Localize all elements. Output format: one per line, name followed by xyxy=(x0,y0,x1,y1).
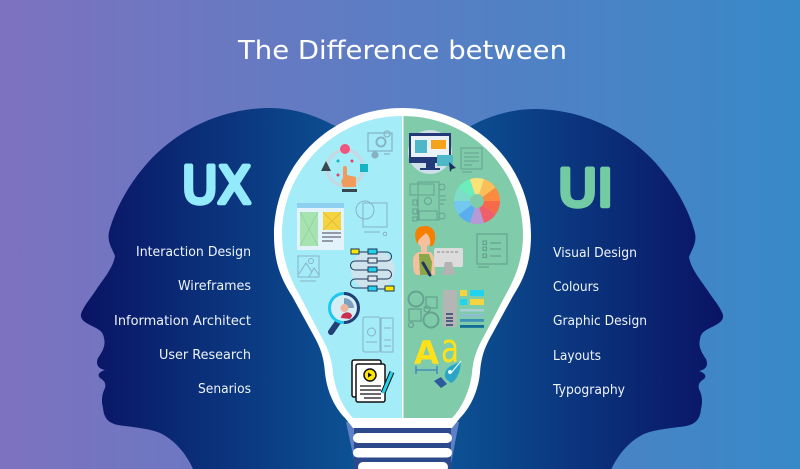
icon: typography Aa with pen nib: a xyxy=(441,326,459,372)
UI heading: UI xyxy=(558,160,613,219)
icon: user research magnifier xyxy=(330,294,358,332)
UI list xyxy=(552,246,647,398)
UI item: Graphic Design: Graphic Design xyxy=(553,314,647,329)
UX item: User Research: User Research xyxy=(159,348,251,363)
UX item: Wireframes: Wireframes xyxy=(178,279,251,294)
icon: designer at computer xyxy=(413,226,463,275)
icon: faded shapes xyxy=(408,292,438,328)
icon: faded checklist xyxy=(477,234,507,267)
UX list xyxy=(114,245,251,397)
UI item: Colours: Colours xyxy=(553,280,599,295)
UX item: Senarios: Senarios xyxy=(198,382,251,397)
icon: flow chart xyxy=(351,249,395,291)
icon: faded image xyxy=(298,256,319,281)
right head silhouette xyxy=(401,109,723,469)
icon: faded document xyxy=(461,148,482,172)
UX heading: UX xyxy=(182,157,251,216)
icon: faded circuit xyxy=(410,182,446,221)
bulb screw base xyxy=(346,422,459,469)
icon: faded frame xyxy=(356,201,387,236)
bulb UI half xyxy=(404,116,523,418)
UX item: Information Architect: Information Architect xyxy=(114,314,251,329)
UI item: Visual Design: Visual Design xyxy=(553,246,637,261)
UI item: Layouts: Layouts xyxy=(553,349,601,364)
icon: document with pen xyxy=(352,360,392,402)
icon: layout panel xyxy=(443,290,484,328)
icon: faded camera xyxy=(368,131,392,158)
light bulb xyxy=(270,108,536,469)
icon: monitor xyxy=(408,130,456,174)
title: The Difference between xyxy=(237,36,567,66)
UX item: Interaction Design: Interaction Design xyxy=(136,245,251,260)
icon: faded phones xyxy=(363,317,393,352)
bulb UX half xyxy=(282,116,402,418)
bulb white outline xyxy=(274,108,531,428)
icon: typography Aa with pen nib: A xyxy=(414,334,439,372)
UI item: Typography: Typography xyxy=(552,383,625,398)
icon: touch interaction xyxy=(321,144,368,192)
icon: wireframe window xyxy=(297,203,344,250)
left head silhouette xyxy=(81,108,403,469)
icon: typography Aa with pen nib xyxy=(414,326,461,388)
icon: colour wheel xyxy=(456,180,498,222)
